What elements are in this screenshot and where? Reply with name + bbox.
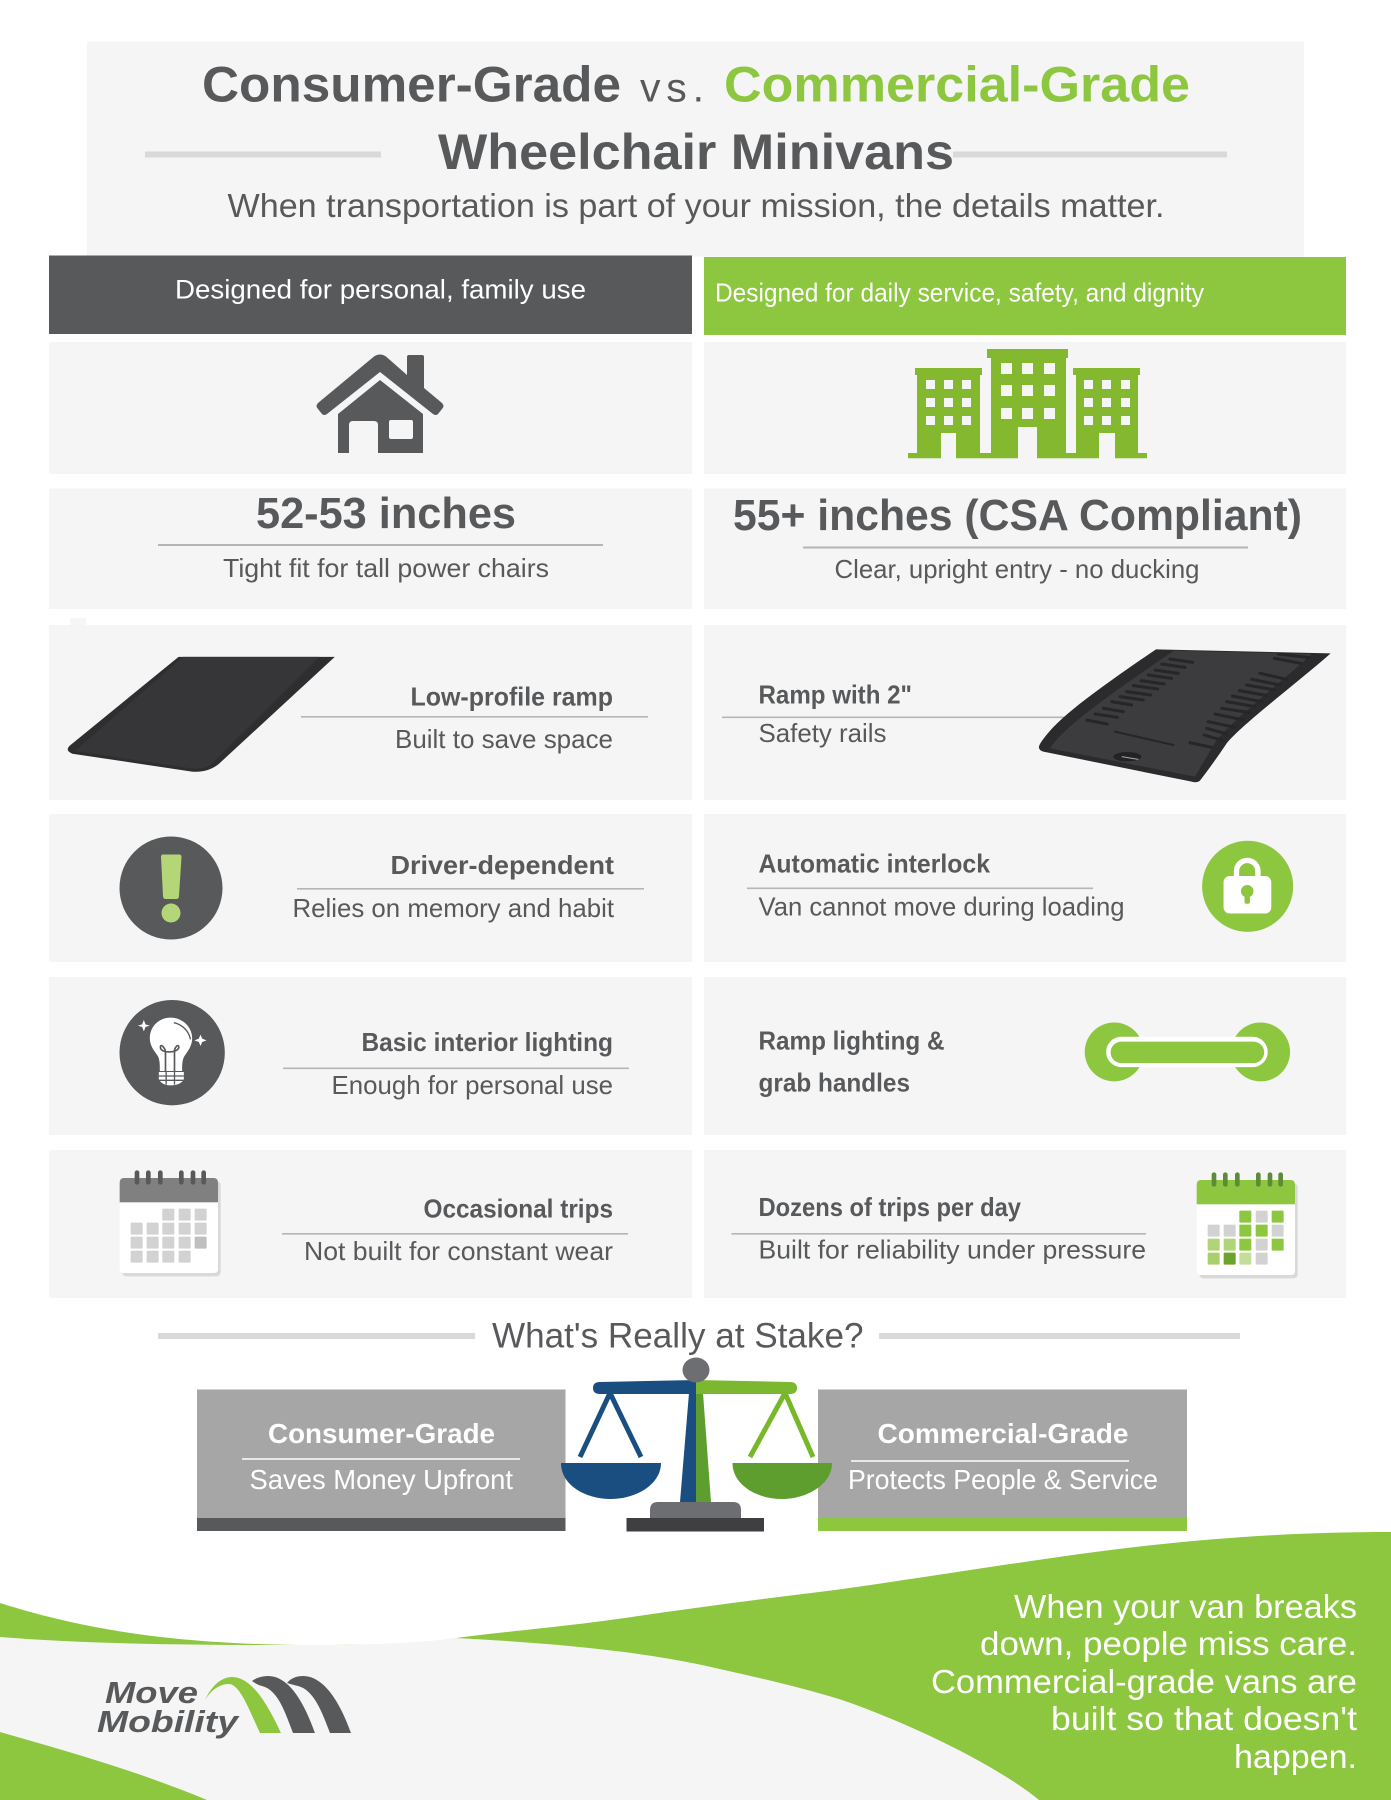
- icon: green calendar: [1197, 1172, 1298, 1278]
- panel: commercial interlock: Van cannot move during loading: [758, 892, 1124, 922]
- panel: consumer door height: Tight fit for tall power chairs: [223, 553, 549, 583]
- title: vs.: [640, 64, 704, 110]
- logo: Move Mobility: [97, 1675, 351, 1739]
- panel: commercial lighting: grab handles: [758, 1068, 910, 1098]
- panel: commercial trips: [704, 1150, 1346, 1298]
- icon: grey calendar: [120, 1170, 221, 1276]
- icon: house: [316, 354, 444, 453]
- icon: padlock: [1202, 841, 1293, 932]
- title: Commercial-Grade: [724, 56, 1190, 112]
- panel: commercial ramp: Safety rails: [758, 718, 886, 748]
- panel: consumer trips: [49, 1150, 692, 1298]
- callout: closing message: down, people miss care.: [980, 1625, 1357, 1662]
- logo: Move Mobility: Mobility: [97, 1704, 240, 1739]
- panel: consumer lighting: [49, 977, 692, 1135]
- icon: warning exclamation: [120, 836, 222, 940]
- panel: consumer trips: Occasional trips: [424, 1194, 613, 1224]
- panel: consumer door height: [49, 488, 692, 609]
- panel: commercial lighting: Ramp lighting &: [758, 1026, 944, 1056]
- title: [202, 56, 1190, 180]
- panel: commercial stake: Protects People & Service: [848, 1464, 1158, 1495]
- panel: consumer driver-dependent: Relies on memory and habit: [292, 893, 615, 923]
- callout: closing message: happen.: [1234, 1738, 1357, 1775]
- panel: commercial door height: [704, 488, 1346, 609]
- callout: closing message: Commercial-grade vans are: [931, 1663, 1357, 1700]
- callout: closing message: When your van breaks: [1014, 1588, 1357, 1625]
- panel: consumer lighting: Basic interior lighting: [362, 1027, 613, 1057]
- footer waves: [0, 1532, 1391, 1800]
- banner: consumer: Designed for personal, family use: [175, 274, 586, 304]
- image: low-profile ramp: [68, 657, 335, 772]
- panel: consumer ramp: Built to save space: [395, 724, 613, 754]
- callout: closing message: [931, 1588, 1357, 1775]
- icon: office buildings: [908, 349, 1147, 458]
- panel: consumer driver-dependent: [49, 814, 692, 962]
- icon: grab handle: [1085, 1022, 1290, 1081]
- icon: light bulb: [119, 1000, 225, 1105]
- callout: closing message: built so that doesn't: [1051, 1700, 1357, 1737]
- panel: consumer driver-dependent: Driver-dependent: [390, 850, 614, 880]
- banner: commercial: Designed for daily service, safety, and dignity: [715, 278, 1204, 308]
- panel: commercial trips: Built for reliability under pressure: [758, 1234, 1146, 1264]
- panel: commercial ramp: Ramp with 2": [758, 680, 912, 710]
- panel: commercial interlock: Automatic interlock: [758, 848, 991, 878]
- banner: commercial: [704, 257, 1346, 335]
- heading: what's at stake: What's Really at Stake?: [492, 1316, 864, 1356]
- panel: consumer ramp: Low-profile ramp: [410, 682, 613, 712]
- heading: what's at stake: [158, 1316, 1240, 1356]
- title: Consumer-Grade: [202, 56, 621, 112]
- panel: commercial ramp: [704, 625, 1346, 800]
- header panel: [87, 42, 1304, 256]
- panel: consumer door height: 52-53 inches: [256, 489, 516, 538]
- panel: commercial door height: Clear, upright entry - no ducking: [834, 554, 1200, 584]
- panel: commercial use: [704, 342, 1346, 474]
- panel: consumer ramp: [49, 618, 692, 800]
- panel: commercial interlock: [704, 814, 1346, 962]
- panel: consumer stake: Saves Money Upfront: [250, 1464, 513, 1495]
- title: Wheelchair Minivans: [438, 124, 954, 180]
- banner: consumer: [49, 256, 692, 334]
- panel: consumer trips: Not built for constant wear: [304, 1236, 613, 1266]
- icon: balance scale: [561, 1358, 832, 1532]
- panel: commercial stake: [818, 1390, 1187, 1531]
- subtitle: When transportation is part of your mission, the details matter.: [228, 187, 1164, 224]
- image: ramp with safety rails: [1039, 649, 1331, 782]
- panel: consumer stake: Consumer-Grade: [268, 1418, 495, 1449]
- panel: commercial lighting: [704, 977, 1346, 1135]
- panel: consumer use: [49, 342, 692, 474]
- panel: commercial trips: Dozens of trips per day: [758, 1192, 1021, 1222]
- logo: Move Mobility: Move: [105, 1675, 198, 1710]
- panel: commercial door height: 55+ inches (CSA Compliant): [733, 491, 1302, 540]
- panel: consumer lighting: Enough for personal use: [332, 1070, 613, 1100]
- panel: commercial stake: Commercial-Grade: [878, 1418, 1128, 1449]
- panel: consumer stake: [197, 1390, 566, 1531]
